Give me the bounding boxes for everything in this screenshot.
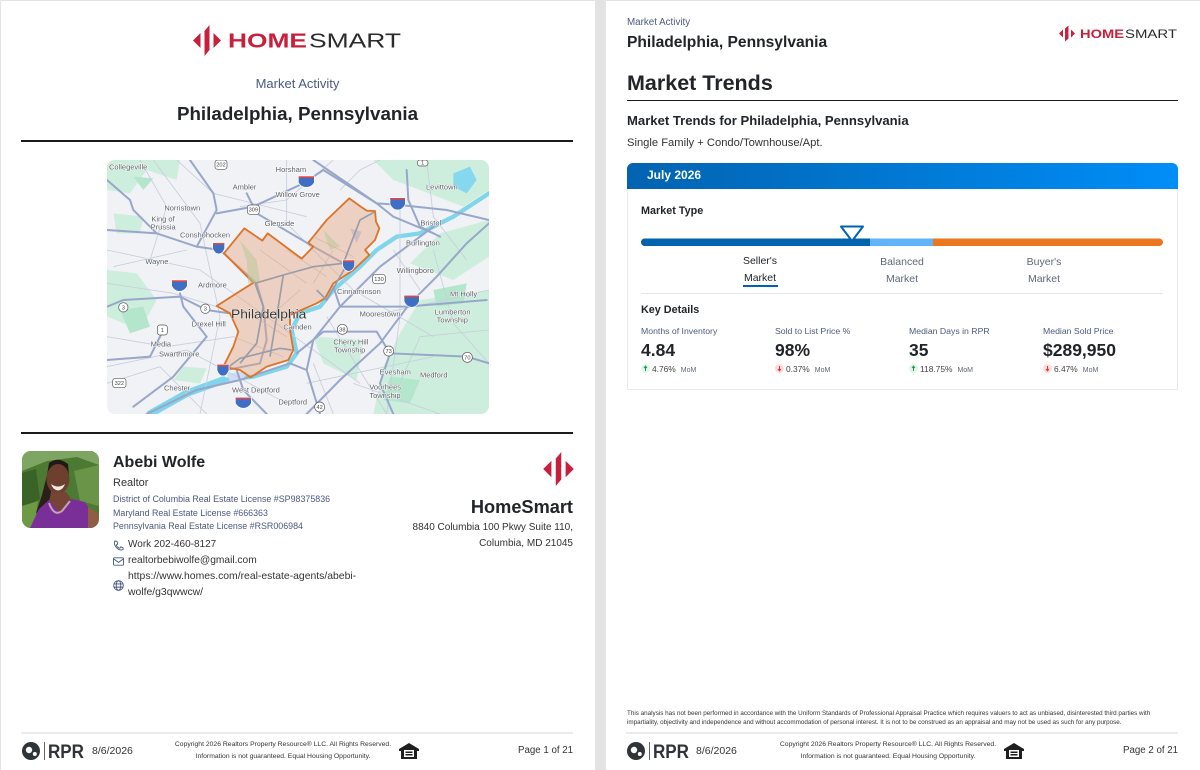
- place labels: Mt Holly: [450, 289, 477, 298]
- metric: median sold price: $289,950: [1043, 340, 1116, 360]
- icon: globe: [113, 580, 124, 591]
- place labels: Burlington: [406, 238, 440, 247]
- map of Philadelphia: 1: [161, 328, 164, 334]
- agent licenses: Pennsylvania Real Estate License #RSR006984: [113, 521, 303, 531]
- brokerage address: 8840 Columbia 100 Pkwy Suite 110,: [413, 522, 573, 533]
- agent name: Abebi Wolfe: [113, 454, 205, 471]
- metric: sold to list price: 0.37% MoM: [786, 364, 830, 374]
- place labels: Evesham: [380, 367, 411, 376]
- logo: HomeSmart large: HOME: [228, 30, 307, 52]
- place labels: Willow Grove: [276, 190, 320, 199]
- copyright: [175, 741, 391, 760]
- city boundary: [217, 198, 379, 377]
- place labels: Township: [334, 346, 365, 355]
- place labels: Glenside: [265, 219, 294, 228]
- subtitle: page 1: Market Activity: [256, 76, 339, 91]
- metric: sold to list price: [775, 326, 850, 374]
- place labels: Conshohocken: [180, 231, 230, 240]
- page number: Page 2 of 21: [1123, 745, 1178, 756]
- map of Philadelphia: [107, 160, 489, 414]
- place labels: Township: [369, 391, 401, 400]
- green areas: [107, 160, 489, 414]
- agent website: https://www.homes.com/real-estate-agents/abebi-: [128, 571, 356, 582]
- icon: equal housing: [1004, 743, 1024, 759]
- disclaimer: This analysis has not been performed in accordance with the Uniform Standards of Professional Appraisal Practice which requires valuers to act as unbiased, disinterested third parties with: [627, 710, 1150, 717]
- place labels: Ardmore: [198, 280, 227, 289]
- market label: balanced: Market: [886, 273, 918, 285]
- brokerage address: Columbia, MD 21045: [479, 538, 573, 549]
- RPR logo: RPR: [653, 742, 689, 763]
- page 2: [606, 1, 1200, 770]
- place labels: Prussia: [151, 222, 177, 231]
- gauge marker: [841, 226, 863, 241]
- place labels: Media: [151, 340, 172, 349]
- copyright: Copyright 2026 Realtors Property Resource® LLC. All Rights Reserved.: [780, 741, 996, 748]
- copyright: [780, 741, 996, 760]
- date: 8/6/2026: [92, 745, 133, 757]
- place labels: Norristown: [164, 203, 200, 212]
- place labels: Willingboro: [397, 266, 434, 275]
- metric: months of inventory: [641, 326, 718, 374]
- copyright: Information is not guaranteed. Equal Housing Opportunity.: [801, 753, 975, 760]
- market label: seller's: [743, 255, 777, 284]
- heading: Market Trends: Market Trends: [627, 71, 773, 95]
- metric: median sold price: [1043, 326, 1116, 374]
- metric: months of inventory: 4.84: [641, 340, 675, 360]
- market label: buyer's: [1027, 256, 1061, 285]
- map of Philadelphia: 202: [216, 163, 226, 169]
- place labels: Swarthmore: [159, 349, 199, 358]
- place labels: Drexel Hill: [192, 320, 226, 329]
- interstate shields: [172, 176, 419, 408]
- metric: median days in RPR: 35: [909, 340, 928, 360]
- place labels: Lumberton: [435, 307, 471, 316]
- card header: [627, 163, 1178, 189]
- label: market type: Market Type: [641, 205, 703, 217]
- icon: email: [113, 557, 124, 566]
- minor roads: [107, 160, 489, 414]
- subheading: Market Trends for Philadelphia, Pennsylvania: [627, 113, 909, 128]
- icon: equal housing: [399, 743, 419, 759]
- metric: median days in RPR: 118.75% MoM: [920, 364, 973, 374]
- place labels: Cinnaminson: [337, 287, 381, 296]
- month: July 2026: [647, 168, 701, 182]
- agent licenses: Maryland Real Estate License #666363: [113, 508, 268, 518]
- place labels: Moorestown: [360, 309, 401, 318]
- metric: median sold price: Median Sold Price: [1043, 326, 1114, 336]
- map of Philadelphia: 3: [122, 305, 125, 311]
- map of Philadelphia: 3: [204, 307, 207, 313]
- map of Philadelphia: 130: [374, 277, 384, 283]
- page 1: [1, 1, 595, 770]
- place labels: Horsham: [276, 165, 306, 174]
- agent photo: [22, 451, 99, 528]
- agent role: Realtor: [113, 477, 148, 489]
- icon: phone: [114, 540, 124, 550]
- metric: months of inventory: Months of Inventory: [641, 326, 717, 336]
- water: [150, 193, 489, 414]
- disclaimer: [627, 710, 1150, 726]
- metric: sold to list price: 98%: [775, 340, 810, 360]
- RPR logo: RPR: [48, 742, 84, 763]
- market type gauge: [641, 226, 1163, 246]
- copyright: Information is not guaranteed. Equal Housing Opportunity.: [196, 753, 370, 760]
- metric: median days in RPR: [909, 326, 990, 374]
- map of Philadelphia: 322: [115, 381, 124, 387]
- logo: HomeSmart small: HOME: [1080, 29, 1124, 41]
- place labels: Chester: [164, 384, 191, 393]
- place labels: Collegeville: [109, 163, 147, 172]
- market label: seller's: Market: [744, 272, 776, 284]
- metric: median days in RPR: Median Days in RPR: [909, 326, 990, 336]
- heading: key details: Key Details: [641, 304, 699, 316]
- place labels: Ambler: [233, 183, 257, 192]
- agent email: realtorbebiwolfe@gmail.com: [128, 555, 257, 566]
- RPR logo: [627, 742, 689, 763]
- metric: median sold price: 6.47% MoM: [1054, 364, 1098, 374]
- footer: page 2: [627, 741, 1178, 763]
- icon: HomeSmart mark: [543, 452, 574, 486]
- agent licenses: District of Columbia Real Estate License #SP98375836: [113, 494, 330, 504]
- disclaimer: impartiality, objectivity and independence and without accommodation of personal interest. It is not to be construed as an appraisal and may not be used as such for any purpose.: [627, 718, 1121, 726]
- agent website: [128, 571, 356, 598]
- logo: HomeSmart large: [193, 25, 401, 56]
- logo: HomeSmart small: SMART: [1125, 29, 1177, 41]
- footer: page 1: [22, 741, 573, 763]
- date: 8/6/2026: [696, 745, 737, 757]
- place labels: Cherry Hill: [333, 337, 369, 346]
- place labels: Camden: [283, 323, 312, 332]
- place labels: King of: [151, 214, 176, 223]
- property types: Single Family + Condo/Townhouse/Apt.: [627, 137, 823, 149]
- highways: [107, 160, 489, 414]
- place labels: Bristol: [420, 218, 442, 227]
- panel: market card: [627, 163, 1178, 390]
- brokerage name: HomeSmart: [471, 497, 573, 517]
- subtitle: page 2: Market Activity: [627, 17, 690, 28]
- logo: HomeSmart large: SMART: [309, 30, 401, 52]
- place labels: Deptford: [278, 397, 307, 406]
- place labels: Wayne: [145, 257, 168, 266]
- title: page 1: Philadelphia, Pennsylvania: [177, 103, 418, 124]
- place labels: West Deptford: [232, 386, 280, 395]
- map of Philadelphia: Philadelphia: [231, 307, 307, 321]
- place labels: [109, 163, 477, 406]
- brokerage address: [412, 522, 573, 549]
- map of Philadelphia: 38: [339, 327, 345, 333]
- place labels: Township: [437, 316, 468, 325]
- route markers: [113, 160, 472, 412]
- market label: balanced: [880, 256, 924, 285]
- copyright: Copyright 2026 Realtors Property Resource® LLC. All Rights Reserved.: [175, 741, 391, 748]
- map of Philadelphia: 42: [317, 405, 323, 411]
- metric: months of inventory: 4.76% MoM: [652, 364, 696, 374]
- market label: buyer's: Buyer's: [1027, 256, 1061, 268]
- map of Philadelphia: 70: [464, 355, 470, 361]
- place labels: Levittown: [426, 183, 458, 192]
- agent licenses: [113, 494, 330, 531]
- place labels: Medford: [420, 371, 448, 380]
- market label: buyer's: Market: [1028, 273, 1060, 285]
- market label: balanced: Balanced: [880, 256, 924, 268]
- agent website: wolfe/g3qwwcw/: [128, 587, 203, 598]
- location heading: page 2: Philadelphia, Pennsylvania: [627, 34, 827, 51]
- metric: sold to list price: Sold to List Price %: [775, 326, 850, 336]
- map of Philadelphia: 73: [386, 349, 392, 355]
- market label: seller's: Seller's: [743, 255, 777, 267]
- map of Philadelphia: 309: [249, 208, 258, 214]
- RPR logo: [22, 742, 84, 763]
- place labels: Voorhees: [369, 383, 401, 392]
- page number: Page 1 of 21: [518, 745, 573, 756]
- map of Philadelphia: 1: [421, 161, 424, 167]
- logo: HomeSmart small: [1059, 26, 1177, 42]
- agent phone: Work 202-460-8127: [128, 539, 216, 550]
